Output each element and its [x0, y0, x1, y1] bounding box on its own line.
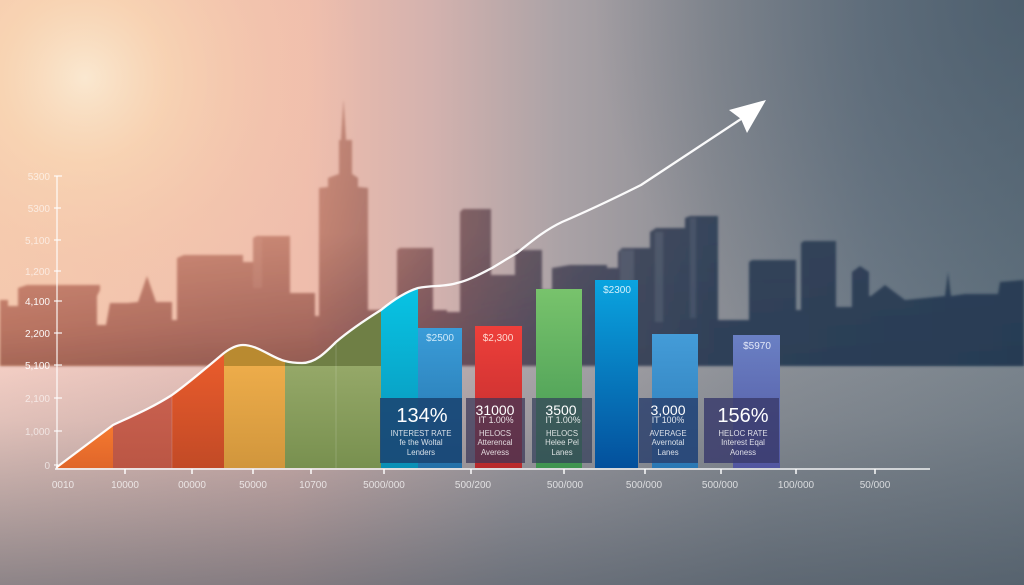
card: 156% heloc rate: HELOC RATE	[718, 429, 768, 438]
card: 134% interest rate	[380, 398, 462, 463]
card: 31000 helocs	[466, 398, 525, 463]
y axis labels: 5,100	[25, 236, 50, 247]
x axis labels: 0010	[52, 480, 75, 491]
card: 3,000 average: 3,000	[650, 402, 686, 418]
bar: light blue	[652, 334, 698, 468]
card: 134% interest rate: fe the Woltal	[399, 438, 443, 447]
y axis labels: 2,200	[25, 329, 50, 340]
card: 3,000 average: Avernotal	[652, 438, 685, 447]
card: 31000 helocs: Averess	[481, 448, 509, 457]
y axis labels: 5300	[28, 204, 50, 215]
dusk shading upper right	[590, 0, 1024, 366]
x axis labels: 10000	[111, 480, 139, 491]
bar: red with value: $2,300	[483, 333, 514, 344]
y axis labels: 1,000	[25, 427, 50, 438]
x axis labels: 10700	[299, 480, 327, 491]
card: 3500 helocs: Lanes	[551, 448, 573, 457]
bar: bright blue with value: $2300	[603, 285, 631, 296]
bar: indigo with value: $5970	[743, 341, 771, 352]
x axis labels: 500/000	[626, 480, 663, 491]
x axis labels: 500/000	[702, 480, 739, 491]
y axis labels: 5300	[28, 172, 50, 183]
bar: red with value	[475, 326, 522, 468]
y axis	[25, 172, 62, 472]
card: 156% heloc rate: Aoness	[730, 448, 756, 457]
card: 156% heloc rate: Interest Eqal	[721, 438, 765, 447]
bar: blue with value	[418, 328, 462, 468]
y axis labels: 0	[44, 461, 50, 472]
x axis labels: 100/000	[778, 480, 815, 491]
y axis labels: 4,100	[25, 297, 50, 308]
card: 3500 helocs: IT 1.00%	[545, 415, 581, 425]
rising arrow	[57, 100, 766, 467]
card: 134% interest rate: 134%	[396, 405, 448, 427]
bar: green	[536, 289, 582, 468]
y axis labels: 1,200	[25, 267, 50, 278]
background sky	[0, 0, 1024, 366]
card: 134% interest rate: Lenders	[407, 448, 435, 457]
bar: bright blue with value	[595, 280, 638, 468]
area dividers	[172, 344, 336, 468]
bar: cyan	[381, 288, 418, 468]
x axis labels: 500/200	[455, 480, 492, 491]
card: 31000 helocs: IT 1.00%	[478, 415, 514, 425]
card: 3,000 average: Lanes	[657, 448, 679, 457]
sun glow	[0, 0, 430, 366]
x axis	[52, 469, 930, 491]
card: 3,000 average: AVERAGE	[649, 429, 687, 438]
bar: blue with value: $2500	[426, 333, 454, 344]
x axis labels	[52, 480, 891, 491]
x axis labels: 5000/000	[363, 480, 405, 491]
area chart under rising curve	[57, 310, 381, 468]
card: 156% heloc rate: 156%	[717, 405, 769, 427]
card: 3500 helocs: HELOCS	[546, 429, 578, 438]
y axis labels	[25, 172, 50, 472]
x axis labels: 00000	[178, 480, 206, 491]
x axis labels: 50/000	[860, 480, 891, 491]
card: 134% interest rate: INTEREST RATE	[391, 429, 451, 438]
card: 3,000 average	[639, 398, 698, 463]
ground reflection	[0, 366, 1024, 585]
x axis labels: 50000	[239, 480, 267, 491]
card: 3500 helocs: 3500	[545, 402, 577, 418]
card: 31000 helocs: HELOCS	[479, 429, 511, 438]
city skyline silhouette	[0, 100, 1024, 366]
card: 31000 helocs: Atterencal	[477, 438, 513, 447]
card: 156% heloc rate	[704, 398, 779, 463]
card: 3500 helocs	[532, 398, 592, 463]
card: 3,000 average: IT 100%	[652, 415, 684, 425]
bar: indigo with value	[733, 335, 780, 468]
y axis labels: 2,100	[25, 394, 50, 405]
y axis labels: 5,100	[25, 361, 50, 372]
x axis labels: 500/000	[547, 480, 584, 491]
card: 3500 helocs: Helee Pel	[545, 438, 579, 447]
card: 31000 helocs: 31000	[476, 402, 515, 418]
